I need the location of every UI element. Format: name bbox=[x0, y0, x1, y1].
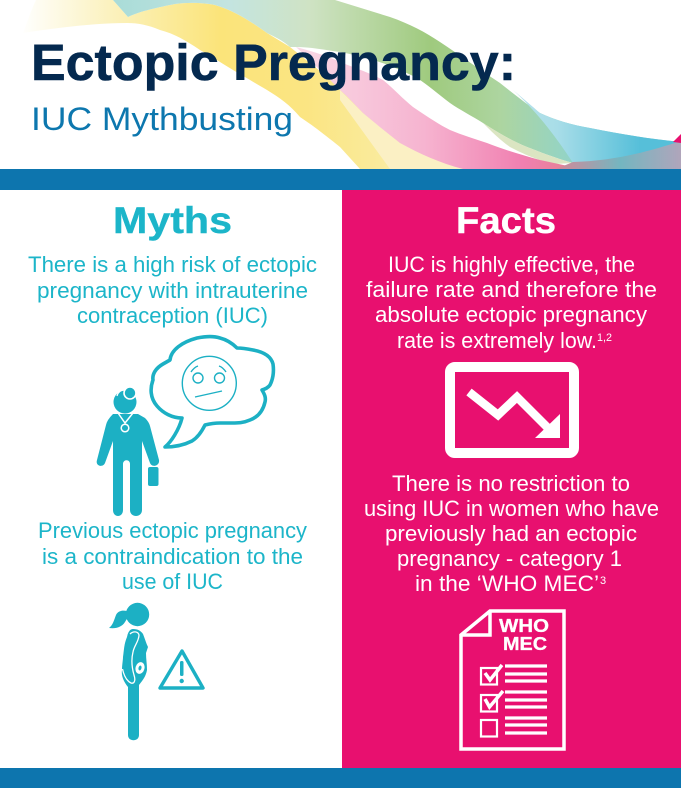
text: fact one bbox=[366, 252, 657, 353]
text: myth one bbox=[28, 252, 317, 328]
checklist bbox=[481, 665, 547, 736]
text: fact one: failure rate and therefore the bbox=[366, 277, 657, 302]
text: myth one: There is a high risk of ectopic bbox=[28, 252, 317, 277]
icon: declining chart bbox=[450, 367, 574, 453]
text: fact two: There is no restriction to bbox=[392, 471, 630, 496]
text: myth two bbox=[38, 518, 307, 594]
icon: doctor figure bbox=[97, 387, 159, 516]
text: fact two: 3 bbox=[600, 575, 606, 587]
text: myth two: is a contraindication to the bbox=[42, 544, 303, 569]
text: fact two: pregnancy - category 1 bbox=[397, 546, 622, 571]
title: Ectopic Pregnancy: bbox=[31, 34, 516, 91]
label: WHO MEC: WHO bbox=[499, 616, 549, 636]
icon: worried face bbox=[182, 356, 236, 410]
subtitle: IUC Mythbusting bbox=[31, 101, 293, 137]
icon: woman with uterus bbox=[109, 603, 149, 740]
text: fact one: rate is extremely low. bbox=[397, 328, 597, 353]
header ribbon artwork bbox=[23, 0, 681, 169]
text: fact two bbox=[364, 471, 659, 596]
header bar bbox=[0, 169, 681, 190]
heading: facts: Facts bbox=[456, 200, 556, 241]
text: myth two: use of IUC bbox=[122, 569, 223, 594]
footer bar bbox=[0, 768, 681, 788]
text: myth two: Previous ectopic pregnancy bbox=[38, 518, 307, 543]
heading: myths: Myths bbox=[113, 200, 232, 241]
text: fact two: previously had an ectopic bbox=[385, 521, 637, 546]
text: fact one: IUC is highly effective, the bbox=[388, 252, 635, 277]
text: fact one: 1,2 bbox=[597, 332, 612, 344]
text: myth one: contraception (IUC) bbox=[77, 303, 268, 328]
text: fact one: absolute ectopic pregnancy bbox=[375, 302, 647, 327]
icon: doctor with worried thought bubble bbox=[97, 336, 273, 516]
panel: facts background bbox=[342, 190, 681, 768]
label: WHO MEC bbox=[499, 616, 549, 654]
icon: thought bubble bbox=[151, 336, 273, 447]
text: fact two: using IUC in women who have bbox=[364, 496, 659, 521]
icon: warning triangle bbox=[160, 651, 203, 688]
text: fact two: in the ‘WHO MEC’ bbox=[415, 571, 599, 596]
label: WHO MEC: MEC bbox=[503, 634, 547, 654]
icon: WHO MEC checklist document bbox=[461, 611, 564, 749]
text: myth one: pregnancy with intrauterine bbox=[37, 278, 308, 303]
